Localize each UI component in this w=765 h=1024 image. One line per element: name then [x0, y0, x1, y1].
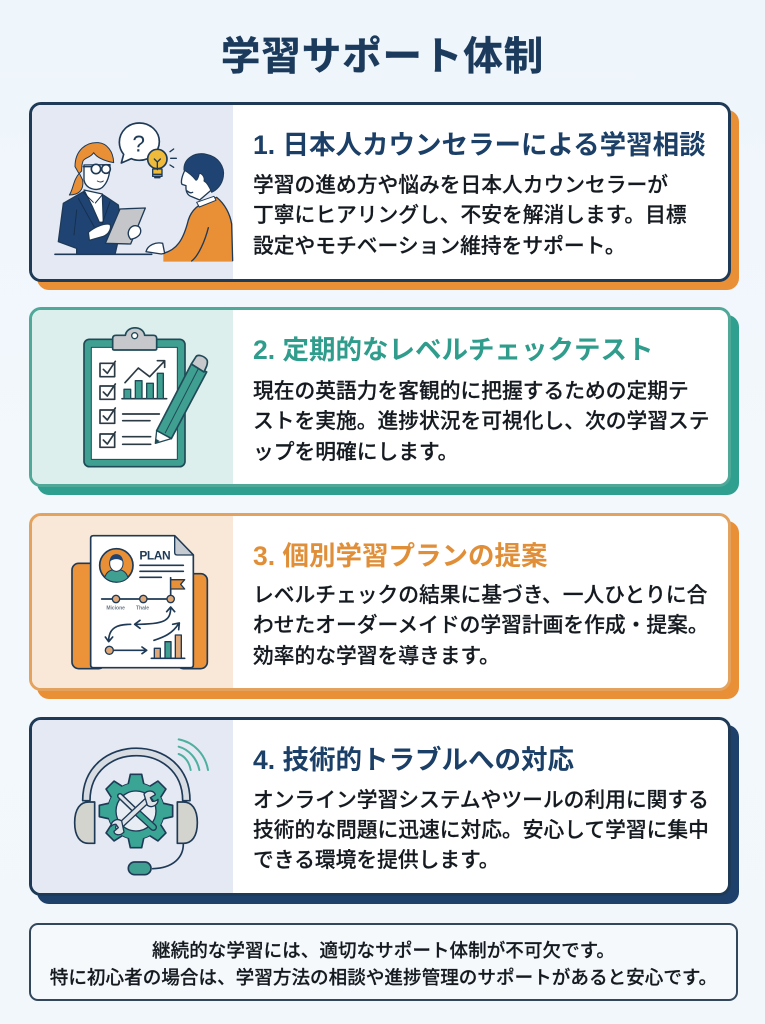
- icon: counselor and student: ?: [132, 131, 145, 157]
- text: technical support: オンライン学習システムやツールの利用に関する: [253, 789, 709, 812]
- icon: plan document: Thale: [136, 606, 149, 612]
- icon: counselor and student: [54, 122, 234, 262]
- text: individual plan: レベルチェックの結果に基づき、一人ひとりに合: [253, 584, 707, 607]
- heading: counselor: 1. 日本人カウンセラーによる学習相談: [253, 130, 706, 160]
- icon: plan document: Micione: [106, 606, 125, 612]
- icon: headset and gear: [74, 738, 209, 876]
- text: level check test: 現在の英語力を客観的に把握するための定期テ: [253, 380, 689, 403]
- heading: level check test: 2. 定期的なレベルチェックテスト: [253, 335, 653, 365]
- panel: level check test: [29, 307, 739, 495]
- text: counselor: [253, 174, 687, 258]
- text: level check test: ップを明確にします。: [253, 441, 458, 464]
- icon: plan document: [71, 534, 208, 670]
- text: level check test: [253, 380, 710, 464]
- text: technical support: [253, 788, 709, 872]
- panel: individual plan: [29, 513, 739, 699]
- title: 学習サポート体制: [221, 35, 544, 79]
- text: counselor: 丁寧にヒアリングし、不安を解消します。目標: [253, 204, 687, 227]
- icon: clipboard and pencil: [83, 327, 208, 468]
- text: technical support: 技術的な問題に迅速に対応。安心して学習に集中: [253, 819, 709, 842]
- icon: plan document: PLAN: [139, 548, 171, 562]
- text: counselor: 設定やモチベーション維持をサポート。: [253, 235, 626, 258]
- text: counselor: 学習の進め方や悩みを日本人カウンセラーが: [253, 174, 668, 197]
- text: level check test: ストを実施。進捗状況を可視化し、次の学習ステ: [253, 410, 710, 433]
- callout: footer note: 特に初心者の場合は、学習方法の相談や進捗管理のサポートがあると安心です。: [50, 967, 717, 988]
- text: individual plan: [253, 584, 709, 668]
- callout: footer note: [29, 923, 738, 1001]
- text: individual plan: 効率的な学習を導きます。: [253, 645, 500, 668]
- text: technical support: できる環境を提供します。: [253, 849, 500, 872]
- panel: counselor: [29, 102, 739, 290]
- callout: footer note: 継続的な学習には、適切なサポート体制が不可欠です。: [152, 940, 615, 961]
- text: individual plan: わせたオーダーメイドの学習計画を作成・提案。: [253, 614, 709, 637]
- panel: technical support: [29, 717, 739, 904]
- heading: technical support: 4. 技術的トラブルへの対応: [253, 745, 574, 775]
- heading: individual plan: 3. 個別学習プランの提案: [253, 541, 547, 571]
